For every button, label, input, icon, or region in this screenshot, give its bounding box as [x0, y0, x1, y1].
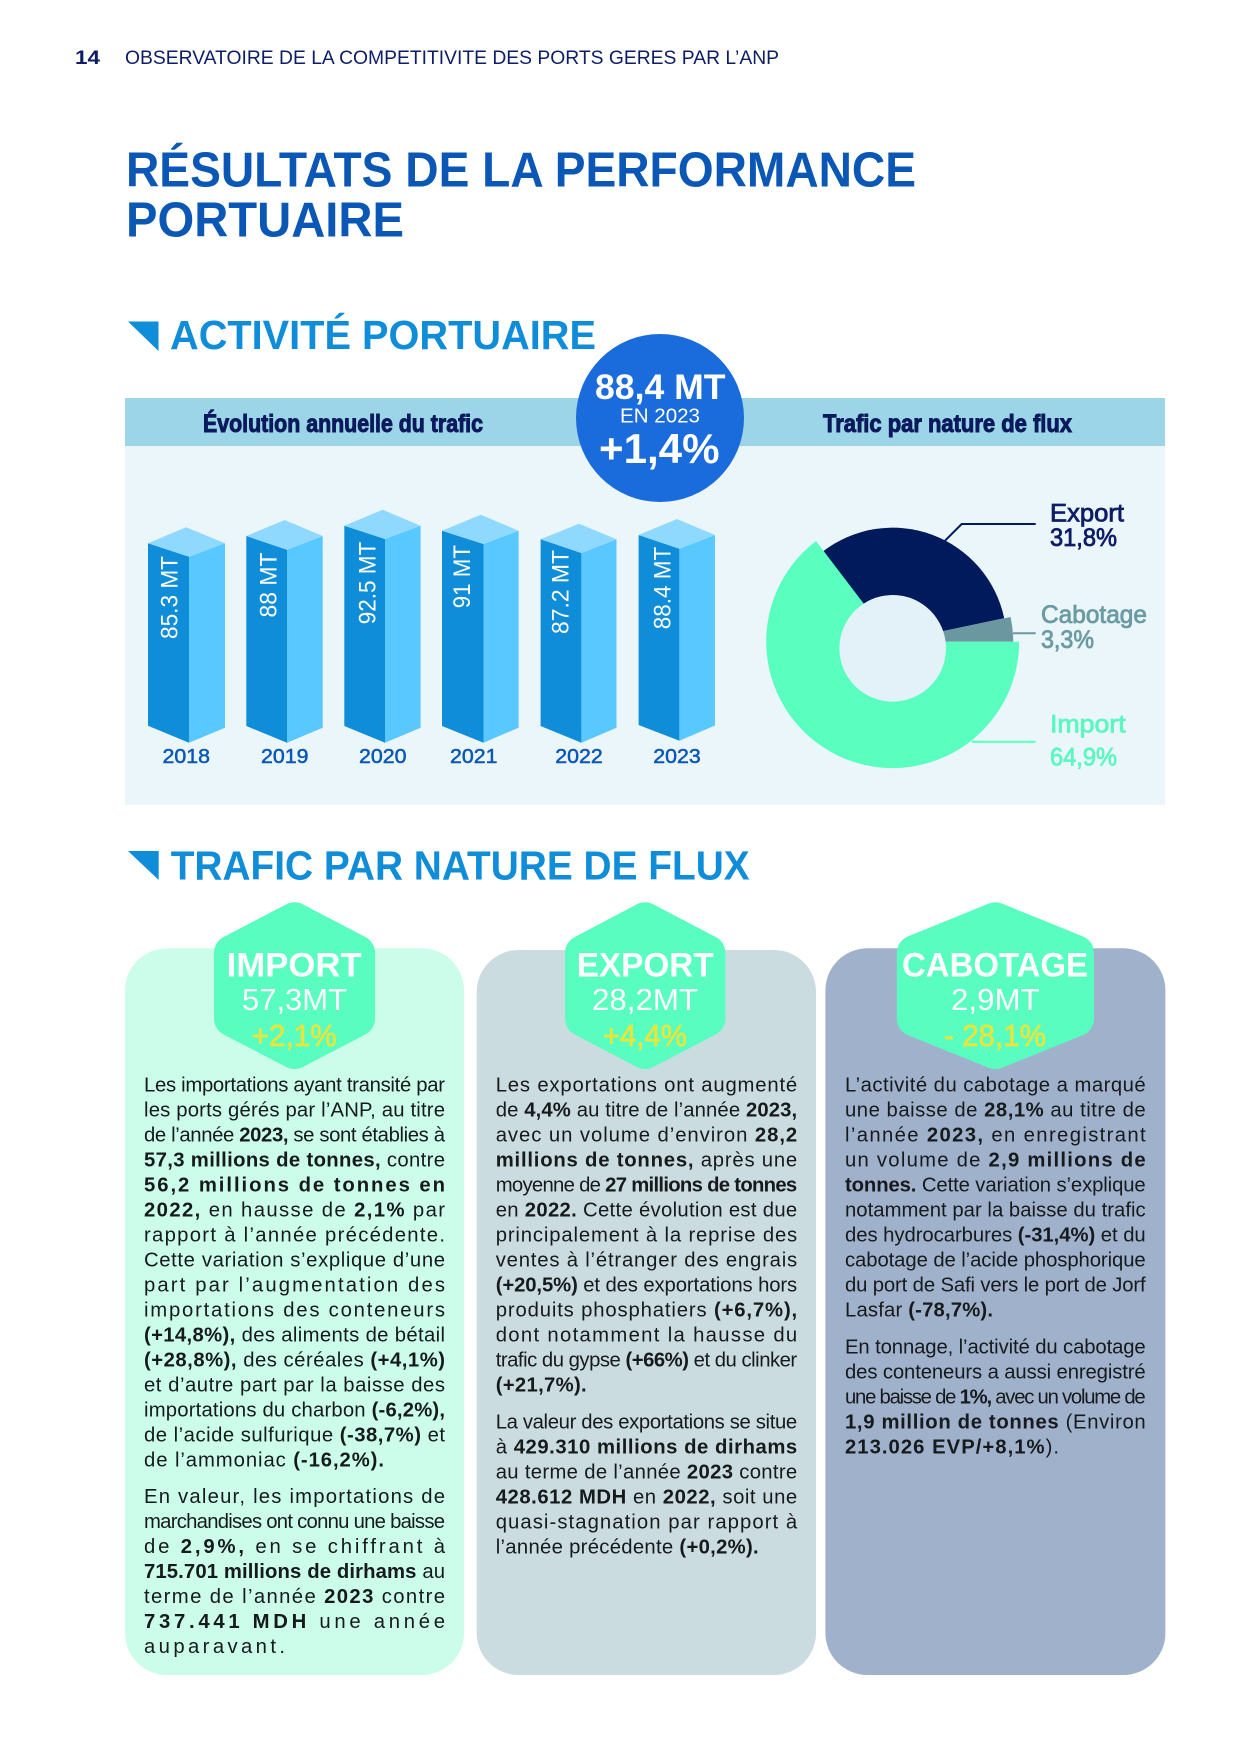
text block: cabotage: une baisse de 1%, avec un volume de	[845, 1386, 1146, 1408]
text block: import: auparavant.	[144, 1636, 285, 1658]
legend: export	[945, 500, 1124, 552]
segment: import	[766, 541, 1019, 768]
hexagon badge: cabotage: - 28,1%	[944, 1018, 1046, 1053]
legend: cabotage	[1013, 601, 1147, 654]
text block: import: rapport à l’année précédente.	[144, 1224, 445, 1246]
text block: export: avec un volume d’environ 28,2	[496, 1124, 797, 1146]
bar 2018	[148, 527, 225, 768]
text block: import: part par l’augmentation des	[144, 1274, 445, 1296]
callout: total trafic 2023: EN 2023	[620, 406, 700, 428]
text block: export: ventes à l’étranger des engrais	[496, 1250, 797, 1272]
text block: import: 737.441 MDH une année	[144, 1611, 445, 1633]
text block: export: 428.612 MDH en 2022, soit une	[496, 1486, 797, 1508]
text block: cabotage: du port de Safi vers le port de Jorf	[845, 1274, 1146, 1296]
legend: export: 31,8%	[1050, 524, 1117, 552]
panel: export	[477, 920, 816, 1675]
bar 2018: 85.3 MT	[156, 556, 184, 639]
hexagon badge: import: IMPORT	[227, 946, 362, 984]
legend: export: Export	[1050, 500, 1124, 528]
legend: cabotage: 3,3%	[1041, 626, 1094, 654]
legend: import: 64,9%	[1050, 744, 1117, 772]
hexagon badge: import: +2,1%	[252, 1018, 337, 1053]
text block: import: et d’autre part par la baisse des	[144, 1374, 445, 1396]
text block: cabotage: En tonnage, l’activité du cabotage	[845, 1336, 1146, 1358]
title: RÉSULTATS DE LA PERFORMANCE	[126, 144, 916, 198]
text block: import: 715.701 millions de dirhams au	[144, 1561, 445, 1583]
panel: import	[125, 920, 464, 1675]
bar 2022	[541, 524, 616, 768]
panel: activité portuaire	[125, 398, 1165, 805]
section heading: trafic par nature de flux: TRAFIC PAR NATURE DE FLUX	[171, 842, 750, 888]
bar 2020: 92.5 MT	[354, 541, 382, 624]
panel: cabotage	[825, 920, 1165, 1675]
hexagon badge: export: +4,4%	[603, 1018, 687, 1053]
hexagon badge: import: 57,3MT	[242, 982, 347, 1017]
hexagon badge: cabotage	[902, 920, 1088, 1053]
text block: import: Cette variation s’explique d’une	[144, 1250, 445, 1272]
hexagon badge: export: EXPORT	[577, 946, 714, 984]
text block: import: Les importations ayant transité par	[144, 1074, 445, 1096]
hexagon badge: cabotage: 2,9MT	[951, 982, 1040, 1017]
title: PORTUAIRE	[126, 194, 404, 248]
bar 2023: 2023	[653, 746, 701, 768]
title	[126, 144, 916, 248]
text block: export: millions de tonnes, après une	[496, 1150, 797, 1172]
text block: export: moyenne de 27 millions de tonnes	[496, 1174, 797, 1196]
text block: cabotage: 213.026 EVP/+8,1%).	[845, 1436, 1059, 1458]
hexagon badge: export	[577, 920, 714, 1053]
bar 2020	[344, 510, 421, 768]
text block: import: terme de l’année 2023 contre	[144, 1586, 445, 1608]
text block: cabotage: une baisse de 28,1% au titre de	[845, 1100, 1146, 1122]
legend: import	[972, 711, 1126, 772]
bar 2023	[639, 519, 715, 768]
text block: export: principalement à la reprise des	[496, 1224, 797, 1246]
text block: import: importations des conteneurs	[144, 1300, 445, 1322]
text block: import: 2022, en hausse de 2,1% par	[144, 1200, 445, 1222]
text block: import: de l’année 2023, se sont établies à	[144, 1124, 446, 1146]
bar chart: évolution annuelle du trafic	[148, 510, 715, 768]
callout: total trafic 2023: 88,4 MT	[595, 368, 726, 407]
donut chart: trafic par nature de flux	[766, 528, 1019, 768]
text block: export: (+20,5%) et des exportations hors	[496, 1274, 797, 1296]
section heading: activité portuaire: ACTIVITÉ PORTUAIRE	[170, 312, 596, 358]
text block: cabotage: l’année 2023, en enregistrant	[845, 1124, 1146, 1146]
bar 2022: 2022	[555, 746, 603, 768]
text block: import: de l’acide sulfurique (-38,7%) et	[144, 1424, 445, 1446]
bar 2021	[442, 515, 519, 768]
text block: import: de 2,9%, en se chiffrant à	[144, 1536, 446, 1558]
text block: cabotage: un volume de 2,9 millions de	[845, 1150, 1146, 1172]
text block: export: produits phosphatiers (+6,7%),	[496, 1300, 797, 1322]
text block: import: marchandises ont connu une baisse	[144, 1511, 445, 1533]
text block: import: les ports gérés par l’ANP, au titre	[144, 1100, 445, 1122]
text block: import: (+14,8%), des aliments de bétail	[144, 1324, 445, 1346]
bar 2022: 87.2 MT	[548, 550, 574, 634]
bar 2018: 2018	[162, 746, 210, 768]
heading: trafic par nature de flux: Trafic par nature de flux	[823, 410, 1072, 438]
text block: export: La valeur des exportations se situe	[496, 1412, 797, 1434]
hexagon badge: import	[227, 920, 362, 1053]
callout: total trafic 2023: +1,4%	[599, 425, 720, 472]
legend: cabotage: Cabotage	[1041, 601, 1147, 629]
hexagon badge: export: 28,2MT	[592, 982, 698, 1017]
text block: import: 56,2 millions de tonnes en	[144, 1174, 445, 1196]
bar 2019	[246, 520, 323, 768]
text block: import	[144, 1074, 446, 1658]
text block: export: dont notamment la hausse du	[496, 1324, 797, 1346]
text block: cabotage: notamment par la baisse du trafic	[845, 1200, 1146, 1222]
heading: évolution annuelle du trafic: Évolution annuelle du trafic	[203, 409, 483, 438]
callout: total trafic 2023	[576, 334, 744, 502]
text block: export: quasi-stagnation par rapport à	[496, 1512, 798, 1534]
bar 2019: 2019	[261, 746, 308, 768]
text block: import: importations du charbon (-6,2%),	[144, 1400, 445, 1422]
text block: export: Les exportations ont augmenté	[496, 1074, 797, 1096]
text block: cabotage: cabotage de l’acide phosphorique	[845, 1250, 1146, 1272]
text block: cabotage: Lasfar (-78,7%).	[845, 1300, 993, 1322]
text block: export: (+21,7%).	[496, 1374, 587, 1396]
text block: cabotage: des hydrocarbures (-31,4%) et du	[845, 1224, 1146, 1246]
text block: export	[496, 1074, 798, 1558]
text block: cabotage: des conteneurs a aussi enregistré	[845, 1362, 1146, 1384]
text block: cabotage: 1,9 million de tonnes (Environ	[845, 1412, 1146, 1434]
text block: import: 57,3 millions de tonnes, contre	[144, 1150, 445, 1172]
segment: cabotage	[893, 617, 1013, 642]
text block: import: En valeur, les importations de	[144, 1486, 445, 1508]
bar 2020: 2020	[359, 746, 406, 768]
text block: cabotage: L’activité du cabotage a marqué	[845, 1074, 1146, 1096]
bar 2021: 2021	[450, 746, 498, 768]
hexagon badge: cabotage: CABOTAGE	[902, 946, 1088, 984]
bar 2023: 88.4 MT	[650, 546, 676, 629]
bar 2021: 91 MT	[449, 545, 476, 608]
text block: import: de l’ammoniac (-16,2%).	[144, 1450, 384, 1472]
page header: 14	[75, 48, 101, 69]
text block: cabotage	[845, 1074, 1146, 1458]
legend: import: Import	[1050, 711, 1126, 739]
text block: export: au terme de l’année 2023 contre	[496, 1462, 797, 1484]
page header: OBSERVATOIRE DE LA COMPETITIVITE DES PORTS GERES PAR L’ANP	[125, 48, 779, 69]
text block: export: à 429.310 millions de dirhams	[496, 1436, 797, 1458]
text block: export: en 2022. Cette évolution est due	[496, 1200, 797, 1222]
bar 2019: 88 MT	[256, 552, 283, 618]
text block: export: trafic du gypse (+66%) et du clinker	[496, 1350, 797, 1372]
text block: export: l’année précédente (+0,2%).	[496, 1536, 759, 1558]
text block: cabotage: tonnes. Cette variation s’explique	[845, 1174, 1146, 1196]
text block: import: (+28,8%), des céréales (+4,1%)	[144, 1350, 445, 1372]
text block: export: de 4,4% au titre de l’année 2023,	[496, 1100, 797, 1122]
segment: export	[822, 528, 1004, 642]
